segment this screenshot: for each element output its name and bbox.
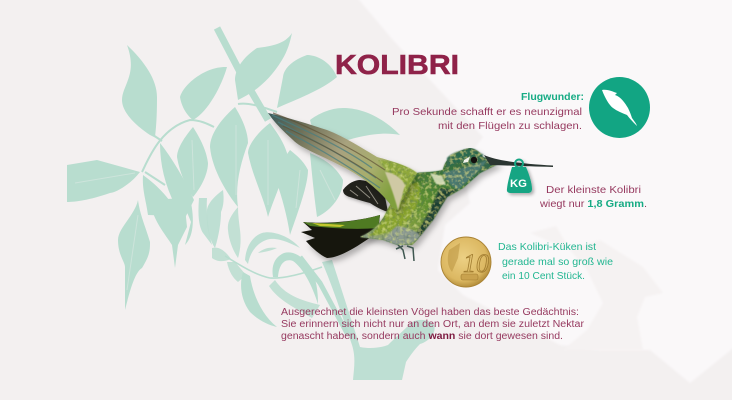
text block: memory (281, 307, 585, 342)
stem and base at the bottom (322, 260, 435, 380)
body shadow (360, 148, 500, 245)
rear wing (343, 180, 388, 212)
background map: grey island (530, 226, 663, 350)
text block: memory: genascht haben, sondern auch wann sie dort gewesen sind. (281, 331, 563, 342)
icon: feather in circle (589, 77, 650, 138)
text block: chick size: gerade mal so groß wie (502, 256, 613, 268)
background map: light region (355, 0, 732, 383)
text block: memory: Sie erinnern sich nicht nur an den Ort, an dem sie zuletzt Nektar (281, 319, 585, 330)
text block: flight wonder: Flugwunder: (521, 91, 584, 103)
hummingbird (268, 113, 553, 261)
text block: chick size (498, 241, 613, 282)
stems (142, 28, 348, 335)
text block: flight wonder: Pro Sekunde schafft er es neunzigmal (392, 106, 582, 118)
icon: 10 cent coin: 10 (463, 249, 489, 278)
icon: 10 cent coin (441, 237, 491, 287)
feet (396, 245, 414, 261)
text block: smallest hummingbird (539, 184, 647, 210)
icon: KG weight on beak (507, 160, 532, 193)
tail (301, 215, 380, 258)
leaf group: hanging leaves (118, 107, 343, 327)
leaf group: upper leaves (67, 33, 400, 202)
body plumage (360, 148, 500, 245)
text block: smallest hummingbird: Der kleinste Kolibri (546, 184, 641, 196)
text block: flight wonder (392, 91, 584, 132)
face details (430, 156, 477, 185)
text block: memory: Ausgerechnet die kleinsten Vögel haben das beste Gedächtnis: (281, 307, 579, 318)
text block: smallest hummingbird: wiegt nur 1,8 Gramm. (539, 198, 647, 210)
plant illustration (67, 28, 435, 380)
text block: chick size: ein 10 Cent Stück. (502, 270, 585, 282)
title: KOLIBRI (335, 49, 459, 80)
text block: flight wonder: mit den Flügeln zu schlagen. (438, 120, 582, 132)
leaf veins (75, 125, 335, 290)
icon: KG weight on beak: KG (510, 178, 527, 190)
text block: chick size: Das Kolibri-Küken ist (498, 241, 596, 253)
beak (484, 155, 553, 167)
front wing (268, 113, 417, 210)
